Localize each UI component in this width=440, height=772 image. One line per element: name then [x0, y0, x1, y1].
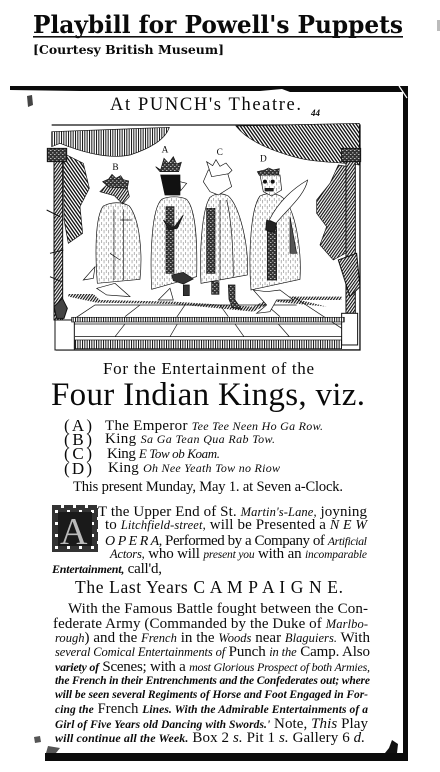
main paragraph: will continue all the Week. Box 2 s. Pit 1 s. Gallery 6 d. — [55, 730, 365, 746]
opening paragraph: to Litchfield-street, will be Presented a N E W — [105, 517, 368, 533]
opening paragraph: Actors, who will present you with an incomparable — [109, 546, 367, 562]
opening paragraph: Entertainment, call'd, — [51, 561, 162, 577]
opening paragraph — [51, 504, 368, 577]
right curtain swag — [236, 123, 359, 165]
list of kings: King E Tow ob Koam. — [107, 446, 220, 462]
subtitle: courtesy credit: [Courtesy British Museum] — [33, 43, 224, 57]
heading: Four Indian Kings: Four Indian Kings, viz. — [51, 377, 365, 413]
main paragraph: cing the French Lines. With the Admirable Entertainments of a — [55, 701, 368, 717]
list of kings: King Oh Nee Yeath Tow no Riow — [108, 460, 280, 476]
main paragraph: federate Army (Commanded by the Duke of Marlbo- — [53, 616, 368, 632]
king B: B — [112, 163, 119, 173]
drop cap A — [52, 505, 98, 553]
list of kings: (A) — [64, 416, 92, 435]
king C: C — [217, 148, 223, 158]
heading: The Last Years Campaigne: The Last Years C A M P A I G N E. — [75, 577, 343, 597]
list of kings: The Emperor Tee Tee Neen Ho Ga Row. — [105, 418, 323, 434]
title: Playbill for Powell's Puppets — [33, 10, 403, 39]
main paragraph — [53, 601, 370, 746]
left curtain swag — [52, 127, 169, 156]
list of kings — [64, 416, 323, 478]
left side drape — [63, 153, 89, 243]
king B — [83, 163, 141, 297]
list of kings: (B) — [64, 430, 92, 449]
stage floor — [68, 294, 344, 349]
right side drape — [317, 165, 348, 260]
main paragraph: the French in their Entrenchments and the Confederates out; where — [55, 675, 370, 687]
list of kings: (C) — [64, 444, 92, 463]
king D — [250, 155, 308, 313]
opening paragraph: T the Upper End of St. Martin's-Lane, joyning — [98, 504, 368, 520]
main paragraph: several Comical Entertainments of Punch in the Camp. Also — [55, 644, 370, 660]
stage frame — [52, 125, 360, 350]
main paragraph: will be seen several Regiments of Horse and Foot Engaged in For- — [55, 689, 368, 701]
king A: A — [162, 145, 169, 155]
king C — [200, 148, 248, 309]
list of kings: (D) — [64, 459, 92, 478]
king D: D — [260, 155, 267, 165]
right column — [338, 148, 361, 345]
main paragraph: With the Famous Battle fought between the Con- — [68, 601, 368, 617]
main paragraph: Girl of Five Years old Dancing with Swords.' Note, This Play — [55, 716, 368, 732]
woodcut: stage with four kings — [47, 123, 361, 350]
left column — [47, 148, 74, 350]
page number mark: 44 — [310, 108, 320, 118]
opening paragraph: O P E R A, Performed by a Company of Artificial — [105, 533, 368, 549]
main paragraph: variety of Scenes; with a most Glorious Prospect of both Armies, — [55, 659, 370, 675]
heading: For the Entertainment: For the Entertainment of the — [103, 359, 314, 378]
main paragraph: rough) and the French in the Woods near Blaguiers. With — [55, 630, 370, 646]
drop cap A: A — [60, 511, 88, 553]
list of kings: King Sa Ga Tean Qua Rab Tow. — [105, 431, 275, 447]
king A — [151, 145, 197, 300]
heading: At Punch's Theatre: At PUNCH's Theatre. — [110, 95, 301, 115]
date line: This present Munday, May 1. at Seven a-Clock. — [73, 479, 343, 495]
